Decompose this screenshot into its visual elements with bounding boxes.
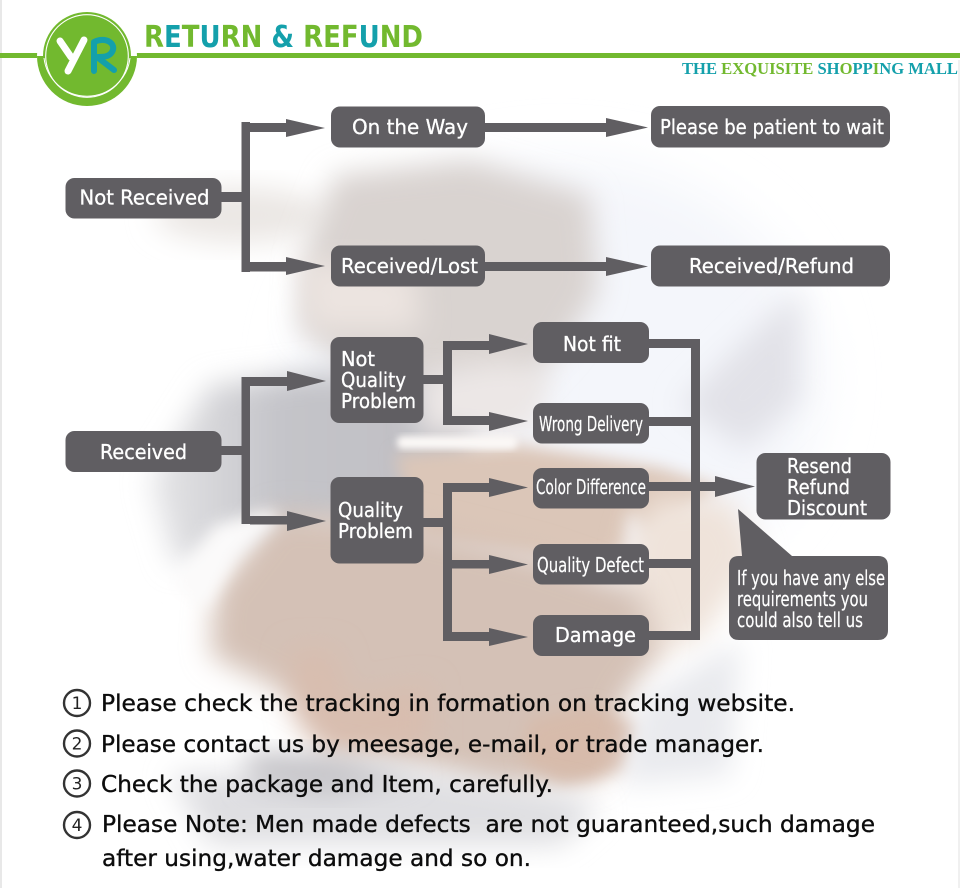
title: RETURN & REFUND xyxy=(144,20,423,55)
box: wrong delivery xyxy=(533,403,649,444)
flow: received connectors xyxy=(221,334,528,646)
box: received xyxy=(66,431,222,472)
box: quality defect xyxy=(533,544,649,584)
box: damage xyxy=(533,615,649,656)
note 4: Please Note: Men made defects are not guaranteed,such damage xyxy=(102,812,875,838)
box: quality problem xyxy=(330,477,424,564)
header rule xyxy=(0,53,960,58)
box: not quality problem: Not xyxy=(341,347,375,371)
note 1: Please check the tracking in formation on tracking website. xyxy=(101,691,795,717)
box: color difference: Color Difference xyxy=(536,475,646,499)
box: please be patient to wait xyxy=(651,106,890,148)
box: resend refund discount: Refund xyxy=(787,475,850,499)
box: not quality problem: Quality xyxy=(341,368,406,392)
box: on the way xyxy=(331,106,485,148)
box: not received: Not Received xyxy=(80,186,210,210)
callout: other requirements: If you have any else xyxy=(737,566,885,590)
box: quality problem: Problem xyxy=(338,519,413,543)
box: received/refund: Received/Refund xyxy=(689,254,854,278)
box: resend refund discount xyxy=(756,453,890,520)
note 2: Please contact us by meesage, e-mail, or trade manager. xyxy=(101,732,764,758)
box: received/lost xyxy=(331,246,485,286)
flow: collector bus to outcomes xyxy=(649,339,755,640)
note 4: 4 xyxy=(72,816,82,836)
box: not fit: Not fit xyxy=(563,332,621,356)
note 4: after using,water damage and so on. xyxy=(102,846,531,872)
box: please be patient to wait: Please be patient to wait xyxy=(660,115,884,139)
box: not quality problem: Problem xyxy=(341,389,416,413)
note 2: 2 xyxy=(72,734,82,754)
note 3: Check the package and Item, carefully. xyxy=(101,772,553,798)
box: received/lost: Received/Lost xyxy=(341,254,478,278)
box: received: Received xyxy=(100,440,187,464)
box: received/refund xyxy=(651,246,890,286)
tagline: THE EXQUISITE SHOPPING MALL xyxy=(682,59,958,78)
box: damage: Damage xyxy=(555,623,636,647)
box: wrong delivery: Wrong Delivery xyxy=(539,412,643,436)
box: on the way: On the Way xyxy=(352,115,468,139)
box: color difference xyxy=(533,468,649,508)
box: not fit xyxy=(533,322,649,363)
box: not quality problem xyxy=(330,337,424,423)
note 3: 3 xyxy=(72,774,82,794)
box: not received xyxy=(66,178,222,218)
logo: YR badge xyxy=(37,6,137,106)
box: resend refund discount: Resend xyxy=(787,454,852,478)
box: quality problem: Quality xyxy=(338,498,403,522)
box: quality defect: Quality Defect xyxy=(537,553,644,577)
note 1: 1 xyxy=(72,694,82,714)
flow: not received connectors xyxy=(221,118,648,276)
box: resend refund discount: Discount xyxy=(787,496,867,520)
note 4 xyxy=(64,812,875,872)
callout: other requirements xyxy=(729,509,888,640)
callout: other requirements: requirements you xyxy=(737,587,868,611)
callout: other requirements: could also tell us xyxy=(737,608,863,632)
